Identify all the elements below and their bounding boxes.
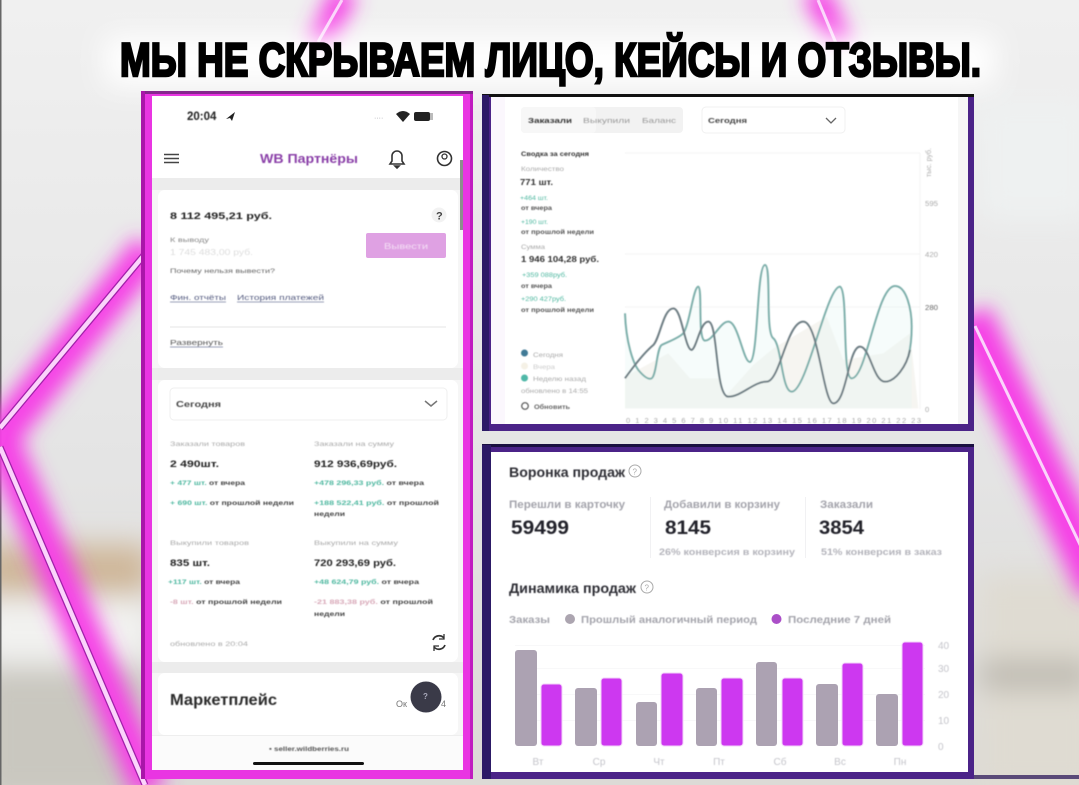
funnel metrics	[509, 497, 942, 558]
chart axes: тыс. руб.	[925, 148, 933, 177]
card: statistics: + 477 шт. от вчера	[170, 480, 246, 487]
card: statistics: -21 883,38 руб. от прошлой	[314, 598, 433, 606]
summary sidebar: +290 427руб.	[521, 297, 566, 303]
bar chart: orders by weekday: 20	[938, 690, 950, 701]
bar chart: orders by weekday	[515, 641, 950, 768]
panel: phone screenshot	[141, 91, 473, 779]
card: statistics: 912 936,69руб.	[314, 459, 397, 470]
funnel metrics: 51% конверсия в заказ	[821, 547, 942, 558]
bar chart: orders by weekday: 10	[938, 716, 950, 727]
summary sidebar: Сегодня	[533, 353, 563, 359]
bar chart: orders by weekday: Пн	[894, 757, 906, 768]
line chart	[625, 153, 920, 409]
funnel metrics: 59499	[511, 518, 569, 539]
period tabs: Сегодня	[708, 116, 747, 125]
funnel metrics: Перешли в карточку	[509, 499, 626, 511]
summary sidebar: обновлено в 14:55	[521, 389, 589, 395]
summary sidebar: от прошлой недели	[521, 229, 594, 236]
card: statistics: Сегодня	[176, 399, 221, 409]
summary sidebar: от вчера	[521, 206, 553, 212]
status bar and header	[152, 96, 463, 178]
summary sidebar: Сумма	[521, 245, 546, 251]
card: statistics: обновлено в 20:04	[170, 640, 249, 648]
funnel metrics: 26% конверсия в корзину	[659, 547, 796, 558]
sales dynamics heading: ?	[644, 584, 650, 592]
card: balance: ?	[436, 210, 443, 222]
summary sidebar: от прошлой недели	[521, 307, 594, 314]
card: balance: К выводу	[170, 237, 210, 244]
card: marketplace	[158, 673, 458, 735]
summary sidebar: 771 шт.	[520, 177, 553, 187]
card: statistics: +188 522,41 руб. от прошлой	[314, 499, 439, 507]
summary sidebar: +190 шт.	[521, 220, 548, 226]
card: balance	[158, 190, 458, 368]
card: statistics: 835 шт.	[170, 558, 210, 569]
summary sidebar	[520, 151, 599, 411]
card: balance: Развернуть	[170, 340, 223, 347]
summary sidebar: 1 946 104,28 руб.	[521, 254, 599, 264]
sales dynamics heading: Динамика продаж	[509, 581, 636, 596]
panel: hourly line chart	[482, 94, 974, 431]
chart axes: 280	[925, 303, 938, 312]
bar chart: orders by weekday: 0	[938, 742, 944, 753]
card: marketplace: Ок	[396, 699, 407, 709]
card: statistics: недели	[314, 611, 345, 618]
summary sidebar: Обновить	[534, 403, 570, 411]
card: statistics: -8 шт. от прошлой недели	[170, 598, 282, 606]
bar chart: orders by weekday: 30	[938, 664, 950, 675]
summary sidebar: Сводка за сегодня	[521, 151, 589, 158]
summary sidebar: Количество	[521, 167, 565, 173]
chart axes: 420	[925, 250, 938, 259]
card: statistics: +48 624,79 руб. от вчера	[314, 578, 420, 586]
card: balance: 8 112 495,21 руб.	[170, 211, 272, 222]
funnel metrics: 3854	[819, 518, 864, 539]
card: balance: Вывести	[384, 242, 428, 251]
bar chart: orders by weekday: Вс	[834, 757, 846, 768]
status bar and header: 20:04	[187, 111, 217, 123]
chart axes	[626, 148, 938, 425]
bar chart: orders by weekday: Пт	[713, 757, 725, 768]
card: statistics: Заказали товаров	[170, 441, 246, 448]
period tabs: Заказали	[528, 116, 573, 125]
chart axes: 0	[925, 405, 929, 414]
chart legend: Последние 7 дней	[788, 614, 891, 626]
card: statistics: 2 490шт.	[170, 459, 219, 470]
bottom edge line	[974, 775, 1079, 779]
card: marketplace: ?	[423, 692, 428, 701]
chart legend: Прошлый аналогичный период	[581, 614, 757, 626]
sales funnel heading: ?	[632, 468, 638, 476]
chart axes: 0 1 2 3 4 5 6 7 8 9 10 11 12 13 14 15 16 17 18 19 20 21 22 23	[626, 416, 921, 425]
summary sidebar: от вчера	[521, 284, 553, 290]
funnel metrics: Добавили в корзину	[664, 499, 781, 511]
bar chart: orders by weekday: Вт	[533, 757, 544, 768]
card: balance: Фин. отчёты	[170, 295, 226, 302]
card: statistics: Выкупили на сумму	[314, 540, 399, 547]
chart legend	[509, 614, 891, 626]
period tabs: Выкупили	[583, 116, 630, 125]
period tabs	[521, 107, 845, 133]
card: statistics: + 690 шт. от прошлой недели	[170, 499, 294, 507]
summary sidebar: Вчера	[533, 365, 556, 371]
period tabs: Баланс	[642, 116, 676, 125]
summary sidebar: +359 088руб.	[522, 273, 567, 279]
panel: sales funnel and dynamics	[482, 444, 974, 779]
card: statistics: недели	[314, 511, 345, 518]
card: balance: История платежей	[237, 294, 324, 302]
card: statistics: +478 296,33 руб. от вчера	[314, 479, 425, 487]
funnel metrics: 8145	[665, 518, 711, 539]
card: statistics: Заказали на сумму	[314, 441, 395, 448]
sales funnel heading: Воронка продаж	[509, 465, 625, 480]
card: marketplace: Маркетплейс	[170, 692, 277, 709]
card: statistics: Выкупили товаров	[170, 540, 250, 547]
browser address bar	[152, 735, 463, 770]
card: balance: Почему нельзя вывести?	[170, 268, 276, 275]
chart axes: 595	[925, 199, 938, 208]
status bar and header: ····	[374, 115, 383, 122]
summary sidebar: Неделю назад	[533, 377, 587, 383]
funnel metrics: Заказали	[820, 499, 873, 511]
bar chart: orders by weekday: Ср	[593, 757, 606, 768]
bar chart: orders by weekday: Сб	[774, 756, 787, 768]
title glow	[105, 36, 995, 86]
status bar and header: WB Партнёры	[260, 151, 358, 166]
summary sidebar: +464 шт.	[520, 196, 548, 202]
card: statistics	[158, 380, 458, 662]
chart legend: Заказы	[509, 614, 550, 626]
bar chart: orders by weekday: Чт	[653, 757, 665, 768]
card: statistics: 720 293,69 руб.	[314, 558, 396, 569]
card: statistics: +117 шт. от вчера	[168, 579, 240, 586]
browser address bar: ▪ seller.wildberries.ru	[269, 746, 349, 753]
bar chart: orders by weekday: 40	[938, 641, 950, 652]
card: marketplace: 4	[441, 699, 446, 709]
card: balance: 1 745 483,00 руб.	[170, 248, 253, 257]
